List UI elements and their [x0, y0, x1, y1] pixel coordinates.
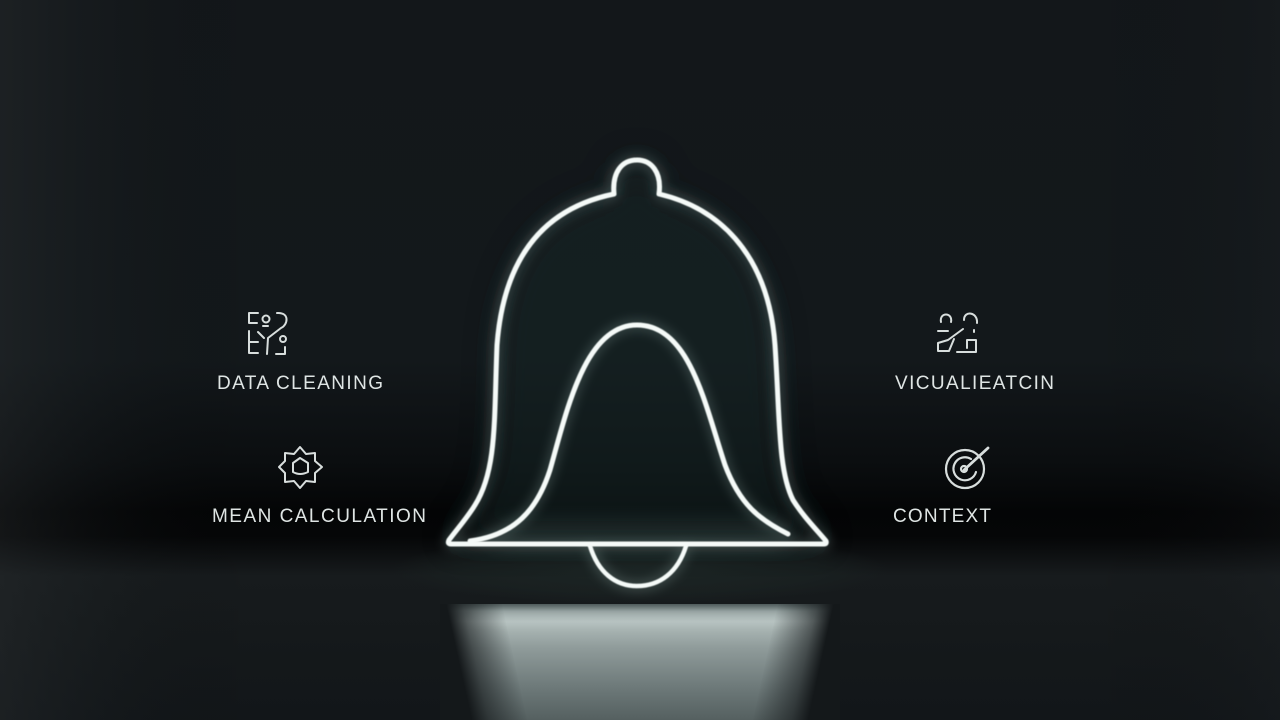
item: visualization [895, 314, 1054, 394]
label: visualization: VICUALIEATCIN [895, 373, 1054, 394]
bell glow halo [448, 160, 826, 586]
neon bell icon [448, 160, 826, 586]
inner bell curve [470, 325, 788, 541]
bell clapper [590, 546, 686, 586]
icon: context target [946, 448, 988, 488]
label: data cleaning: DATA CLEANING [217, 373, 383, 394]
icon: data cleaning [249, 313, 287, 354]
base glow [500, 528, 780, 540]
bell outer outline [448, 160, 826, 544]
item: context [893, 448, 991, 527]
icon: visualization [938, 314, 977, 352]
bell glow fill [449, 160, 826, 541]
item: data cleaning [217, 313, 383, 394]
labels and icons group [212, 313, 1054, 527]
label: mean calculation: MEAN CALCULATION [212, 506, 426, 527]
label: context: CONTEXT [893, 506, 991, 527]
item: mean calculation [212, 447, 426, 527]
icon: mean calculation [279, 447, 322, 488]
floor shadow under bell [390, 535, 890, 604]
floor reflection of bell [440, 604, 840, 720]
